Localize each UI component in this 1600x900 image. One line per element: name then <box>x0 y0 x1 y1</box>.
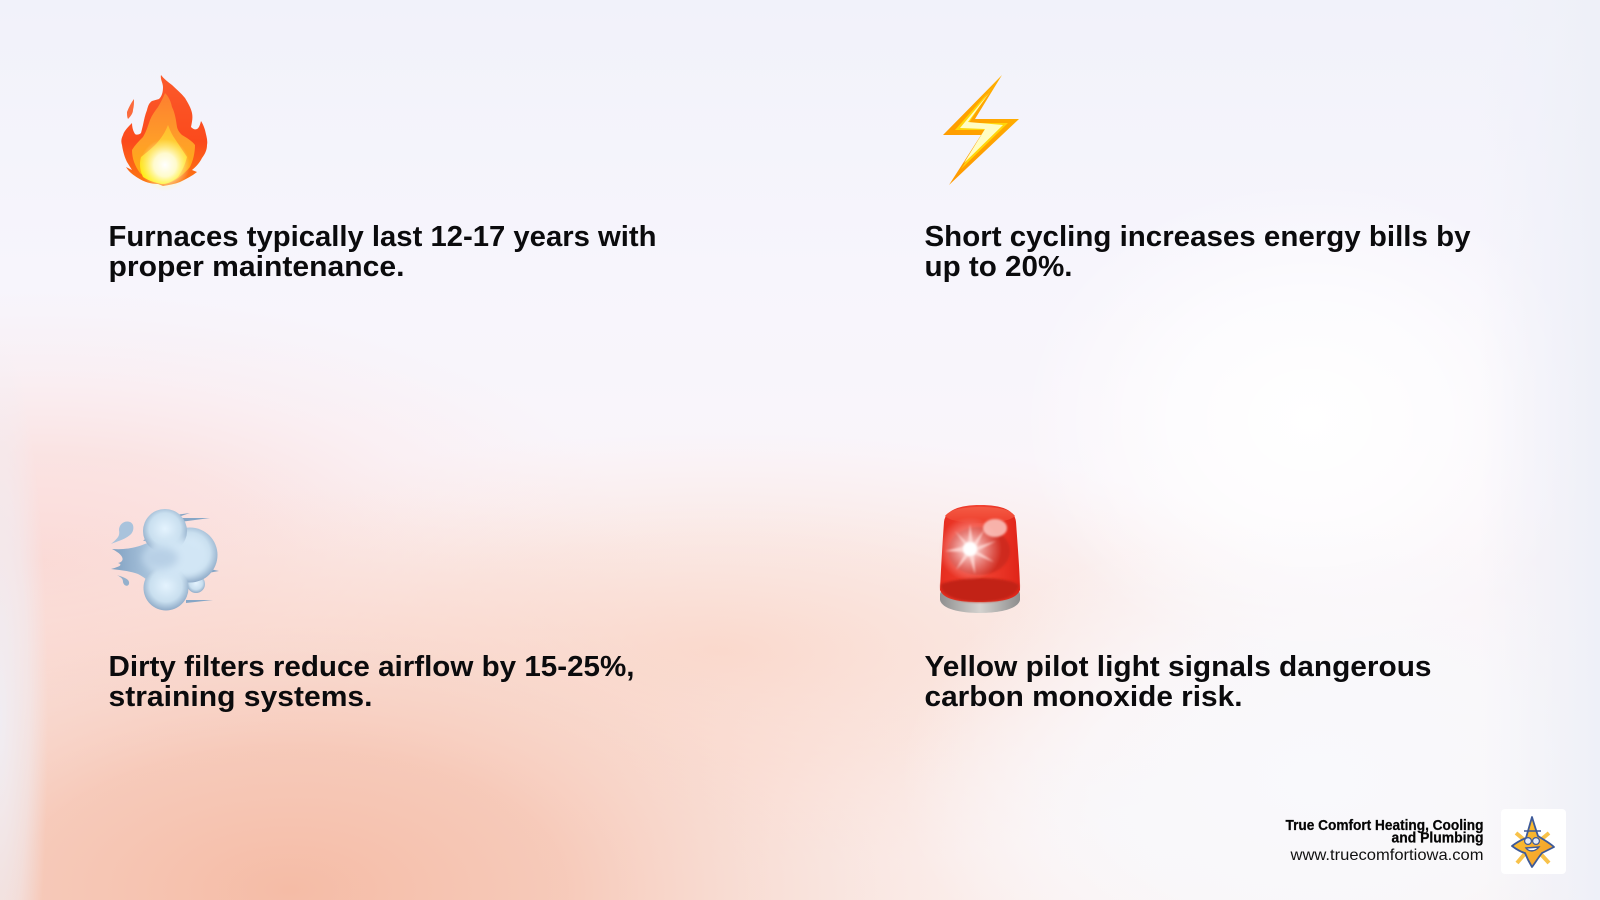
fact text: proper maintenance. <box>108 251 404 283</box>
fact text <box>924 221 1470 283</box>
icon: lightning bolt <box>943 75 1019 185</box>
fact text: carbon monoxide risk. <box>924 681 1242 713</box>
icon: dust cloud <box>111 509 219 610</box>
icon: siren <box>938 505 1020 613</box>
panel: dirty filters <box>108 509 634 713</box>
fact text <box>108 221 656 283</box>
logo tile <box>1501 809 1566 874</box>
company branding <box>1286 809 1566 874</box>
fact text: Furnaces typically last 12-17 years with <box>108 221 656 253</box>
company name: True Comfort Heating, Cooling <box>1286 818 1484 834</box>
icon: star mascot logo <box>1512 817 1554 867</box>
fact text <box>108 651 634 713</box>
panel: short cycling <box>924 75 1470 283</box>
fact text: straining systems. <box>108 681 372 713</box>
fact text: Dirty filters reduce airflow by 15-25%, <box>108 651 634 683</box>
icon: fire <box>121 75 207 191</box>
company name <box>1286 818 1484 846</box>
website url: www.truecomfortiowa.com <box>1289 847 1484 864</box>
fact text: Short cycling increases energy bills by <box>924 221 1470 253</box>
panel: pilot light <box>924 505 1432 713</box>
fact text <box>924 651 1432 713</box>
company name: and Plumbing <box>1392 830 1484 846</box>
fact text: Yellow pilot light signals dangerous <box>924 651 1432 683</box>
panel: furnace lifespan <box>108 75 656 283</box>
fact text: up to 20%. <box>924 251 1072 283</box>
